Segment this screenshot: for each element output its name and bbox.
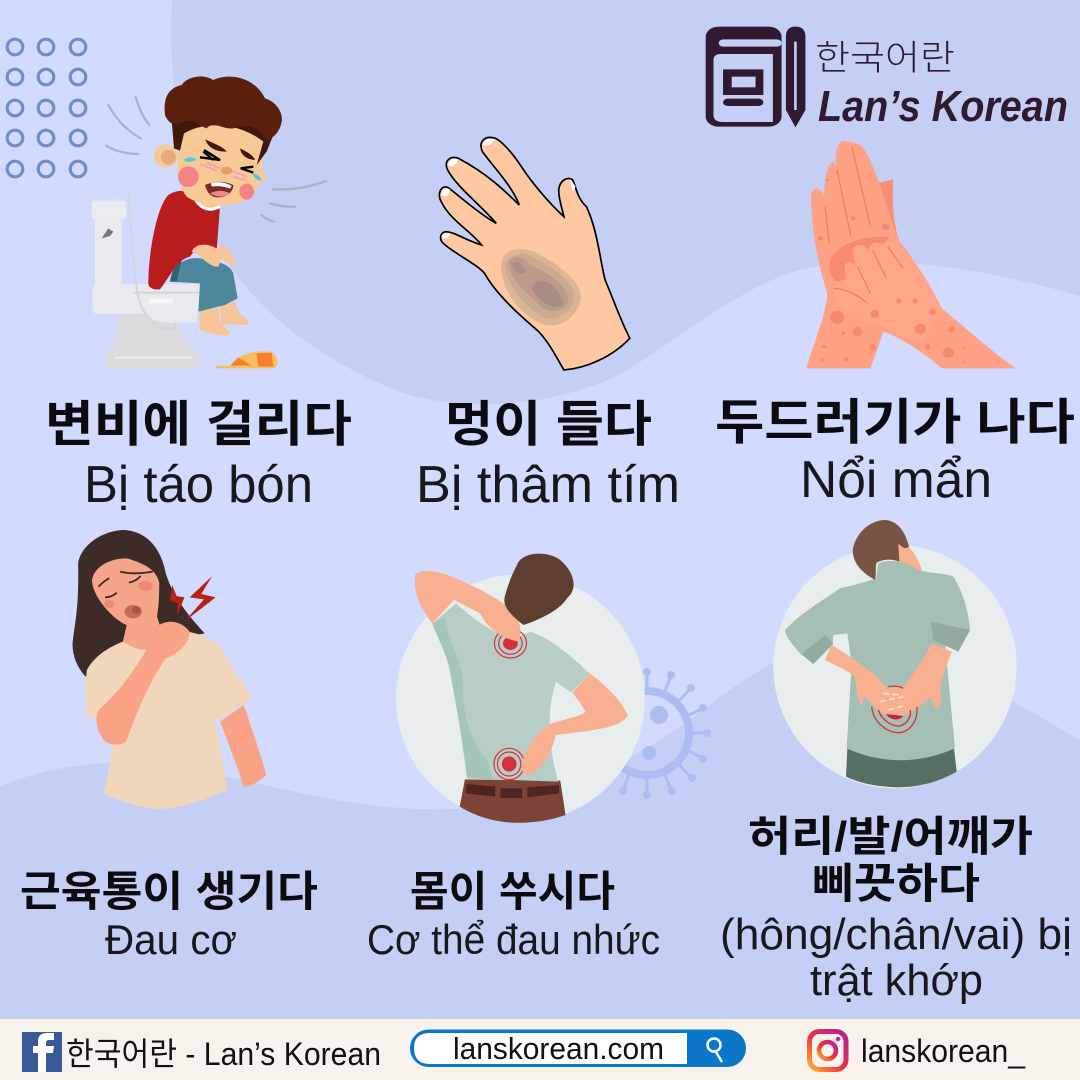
icon: man holding lower back (773, 520, 1017, 788)
search bar: lanskorean.com (453, 1031, 664, 1066)
collar and neck (191, 187, 220, 209)
neck and ear (897, 540, 922, 572)
feet (199, 302, 249, 336)
bruise (501, 249, 581, 326)
caption: dislocated joint: 삐끗하다 (812, 860, 980, 907)
closed eyes and brows (99, 572, 153, 597)
caption: body ache (367, 868, 660, 963)
caption: rash: Nổi mẩn (800, 451, 992, 509)
face (177, 123, 262, 205)
caption: dislocated joint: 허리/발/어깨가 (748, 813, 1033, 860)
caption: bruise: 멍이 들다 (445, 398, 652, 452)
caption: dislocated joint: trật khớp (810, 956, 983, 1005)
caption: body ache: Cơ thể đau nhức (367, 916, 660, 963)
lightning bolts (170, 576, 216, 622)
icon: boy on toilet (92, 76, 326, 369)
tears (183, 157, 262, 181)
fingers (880, 693, 907, 710)
eyes and brows (200, 150, 253, 173)
red shirt (148, 191, 220, 289)
pain markers (494, 629, 526, 780)
hair (73, 530, 205, 677)
backdrop circle (773, 545, 1017, 788)
caption: constipation: Bị táo bón (84, 456, 313, 514)
rash patch (829, 237, 890, 282)
front hand (833, 241, 942, 343)
caption: body ache: 몸이 쑤시다 (410, 868, 615, 915)
mouth (205, 182, 233, 197)
caption: rash: 두드러기가 나다 (715, 396, 1075, 450)
caption: bruise: Bị thâm tím (416, 456, 680, 514)
motion lines (106, 97, 326, 222)
caption: bruise (416, 398, 680, 514)
instagram handle: lanskorean_ (861, 1033, 1026, 1069)
nose (221, 167, 232, 175)
arms and clasped hands (825, 643, 952, 717)
icon: bruised hand (439, 137, 630, 370)
trousers (846, 748, 957, 787)
lower arm (521, 673, 628, 775)
blush (138, 581, 153, 591)
shirt (432, 603, 590, 782)
thumb behind (877, 179, 899, 240)
cheeks (178, 166, 199, 187)
spots (818, 179, 965, 364)
caption: muscle pain: 근육통이 생기다 (20, 868, 318, 915)
icon: hands with rash (806, 141, 1016, 368)
shirt body (785, 561, 970, 760)
hair (853, 520, 909, 580)
trousers (460, 779, 566, 823)
hands on knees (192, 245, 236, 267)
decorative dot grid (7, 39, 86, 177)
shirt (86, 632, 252, 809)
icon: woman with neck pain (73, 530, 266, 809)
backdrop circle (396, 574, 645, 822)
arms (96, 622, 190, 745)
fingernails (441, 139, 576, 239)
trousers (170, 258, 238, 312)
caption: dislocated joint (720, 813, 1072, 1005)
facebook page name: 한국어란 - Lan’s Korean (66, 1036, 381, 1072)
belt (466, 784, 559, 798)
slipper (216, 351, 278, 368)
ears (154, 144, 177, 168)
finger lines (825, 147, 903, 303)
caption: rash (715, 396, 1075, 509)
logo Korean text: 한국어란 (815, 30, 955, 81)
pain rings (872, 686, 917, 733)
hair (165, 76, 282, 165)
search bar (410, 1030, 746, 1067)
caption: dislocated joint: (hông/chân/vai) bị (720, 910, 1072, 959)
logo: Lan's Korean (706, 27, 1068, 131)
icon: instagram (810, 1032, 846, 1070)
icon: facebook (22, 1032, 62, 1072)
face and neck (92, 558, 166, 657)
caption: constipation (45, 398, 352, 514)
icon: book and pencil (706, 27, 805, 127)
footer bar (0, 1019, 1080, 1080)
toilet (92, 193, 202, 369)
icon: virus (599, 668, 711, 799)
caption: constipation: 변비에 걸리다 (45, 398, 352, 452)
caption: muscle pain (20, 868, 318, 963)
mouth (125, 605, 142, 618)
rolled sleeves (802, 622, 970, 664)
hair (504, 554, 574, 625)
hand outline (439, 137, 630, 370)
caption: muscle pain: Đau cơ (105, 916, 237, 963)
back hand (806, 141, 1016, 368)
icon: man with back pain (396, 554, 645, 823)
raised arm (415, 571, 520, 642)
